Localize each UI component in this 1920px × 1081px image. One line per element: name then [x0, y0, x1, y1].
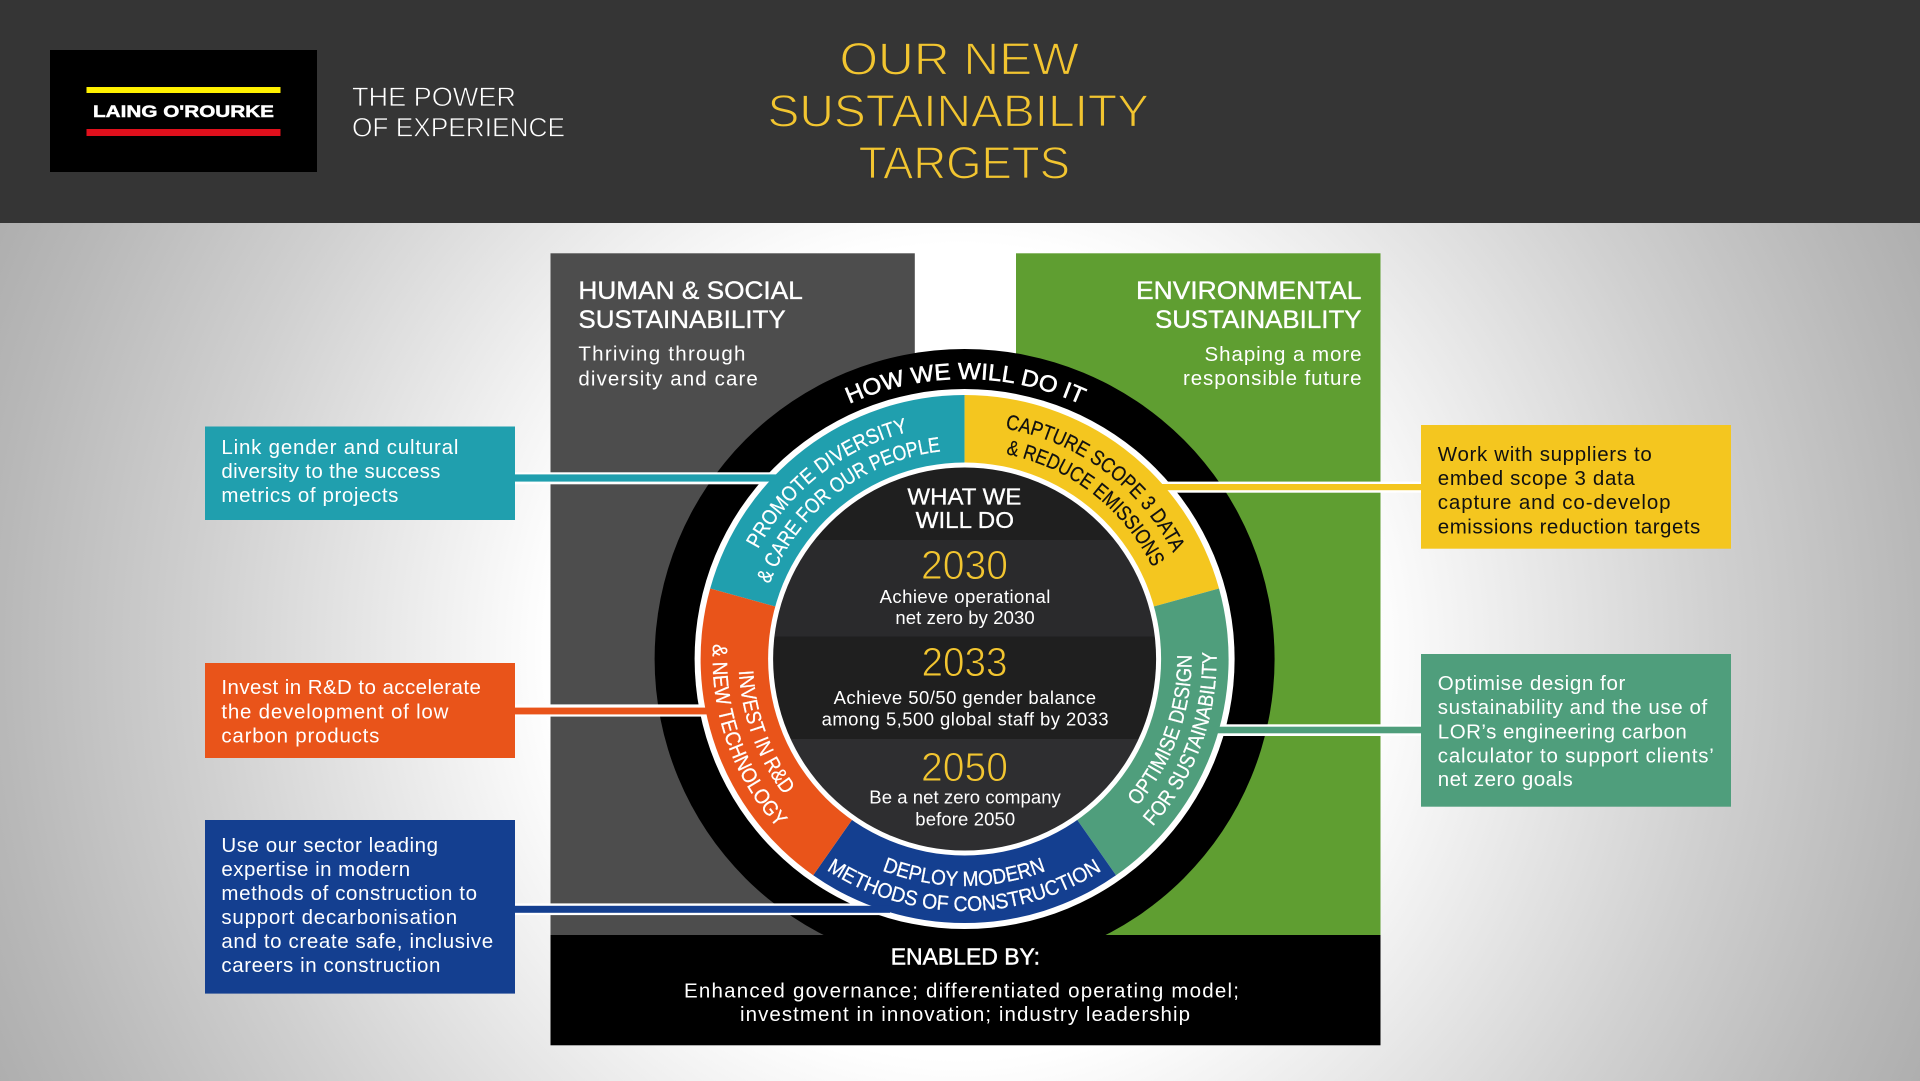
callout: yellow: emissions reduction targets [1438, 515, 1700, 538]
callout: yellow [1421, 425, 1731, 549]
target 2050: Be a net zero company [869, 786, 1062, 807]
callout: green: sustainability and the use of [1438, 696, 1707, 719]
callout: blue: methods of construction to [221, 882, 477, 905]
enabled by text: investment in innovation; industry leadership [740, 1003, 1190, 1026]
panel subheading: environmental: responsible future [1183, 367, 1362, 390]
target 2030: net zero by 2030 [895, 607, 1035, 628]
panel heading: environmental: ENVIRONMENTAL [1136, 277, 1362, 305]
callout: yellow: Work with suppliers to [1438, 443, 1652, 466]
inner heading [907, 484, 1021, 533]
callout: blue: support decarbonisation [221, 906, 457, 929]
panel: human and social sustainability [550, 253, 915, 935]
title: OUR NEW [840, 34, 1080, 85]
title: TARGETS [859, 138, 1070, 189]
segment: optimise design [1077, 588, 1229, 876]
callout: yellow: embed scope 3 data [1438, 467, 1635, 490]
callout: green: calculator to support clients’ [1438, 744, 1714, 767]
callout: teal: diversity to the success [221, 460, 440, 483]
callout: blue: and to create safe, inclusive [221, 930, 493, 953]
callout: orange: carbon products [221, 725, 379, 748]
callout: blue: expertise in modern [221, 858, 410, 881]
enabled by text: Enhanced governance; differentiated operating model; [684, 980, 1239, 1003]
callout: teal: metrics of projects [221, 484, 398, 507]
callout: teal: Link gender and cultural [221, 436, 458, 459]
target 2050 [869, 744, 1062, 830]
target 2030 [880, 542, 1050, 628]
panel subheading: environmental [1183, 343, 1362, 390]
segment: capture scope 3 data [964, 395, 1219, 606]
tagline: THE POWER [352, 82, 516, 112]
enabled by heading: ENABLED BY: [891, 944, 1040, 970]
title: SUSTAINABILITY [768, 86, 1149, 137]
panel subheading: human and social: Thriving through [578, 343, 745, 366]
connector: green [1213, 727, 1421, 733]
target 2050: 2050 [921, 744, 1008, 790]
callout: green: Optimise design for [1438, 672, 1625, 695]
connector outlines [515, 472, 1421, 915]
segment: deploy modern methods [813, 820, 1116, 923]
tagline [352, 82, 565, 143]
callout: green: LOR’s engineering carbon [1438, 720, 1687, 743]
segment: invest in R&D [700, 588, 852, 876]
inner heading: WILL DO [916, 507, 1014, 533]
panel heading: human and social [578, 277, 803, 334]
segment: promote diversity: PROMOTE DIVERSITY [746, 418, 904, 548]
panel heading: environmental [1136, 277, 1362, 334]
target 2030: 2030 [921, 542, 1008, 588]
tagline: OF EXPERIENCE [352, 113, 565, 143]
connector: blue [515, 906, 890, 913]
segment: capture scope 3 data: & REDUCE EMISSIONS [1007, 440, 1164, 566]
target 2033: Achieve 50/50 gender balance [834, 687, 1096, 708]
target 2050: before 2050 [915, 809, 1015, 830]
callout: orange: Invest in R&D to accelerate [221, 676, 481, 699]
callout: yellow: capture and co-develop [1438, 491, 1670, 514]
callout: orange [205, 663, 515, 758]
segment: optimise design: OPTIMISE DESIGN [1128, 656, 1192, 804]
segment: deploy modern methods: METHODS OF CONSTRUCTION [828, 858, 1101, 912]
logo: Laing O'Rourke: LAING O'ROURKE [93, 102, 274, 121]
target 2030: Achieve operational [880, 586, 1050, 607]
panel subheading: environmental: Shaping a more [1204, 343, 1362, 366]
connector: yellow [1158, 484, 1421, 490]
panel: environmental sustainability [1016, 253, 1380, 935]
segment: optimise design: FOR SUSTAINABILITY [1142, 652, 1217, 826]
enabled by text [684, 980, 1239, 1026]
panel heading: environmental: SUSTAINABILITY [1155, 306, 1362, 334]
callout: blue [205, 820, 515, 994]
page background [0, 222, 1920, 1081]
panel subheading: human and social: diversity and care [578, 367, 758, 390]
panel heading: human and social: SUSTAINABILITY [578, 306, 786, 334]
header band [0, 0, 1920, 223]
connector: orange [515, 708, 712, 714]
title [768, 34, 1149, 189]
target 2033 [822, 639, 1108, 730]
panel: enabled by [550, 935, 1380, 1045]
inner heading: WHAT WE [907, 484, 1021, 510]
callout: blue: careers in construction [221, 954, 440, 977]
target 2033: 2033 [922, 639, 1008, 685]
callout: blue: Use our sector leading [221, 834, 438, 857]
panel subheading: human and social [578, 343, 758, 390]
logo: Laing O'Rourke [50, 50, 317, 172]
white ring [695, 389, 1235, 929]
callout: green [1421, 654, 1731, 807]
segment: invest in R&D: INVEST IN R&D [738, 671, 794, 792]
segment: invest in R&D: & NEW TECHNOLOGY [712, 644, 788, 824]
segment: promote diversity [710, 395, 965, 606]
segment: deploy modern methods: DEPLOY MODERN [883, 857, 1045, 886]
target 2033: among 5,500 global staff by 2033 [822, 708, 1108, 730]
callout: green: net zero goals [1438, 768, 1573, 791]
outer black ring [655, 349, 1275, 969]
segment: capture scope 3 data: CAPTURE SCOPE 3 DATA [1007, 415, 1184, 554]
callout: teal [205, 426, 515, 520]
connector: teal [515, 474, 780, 482]
inner circle: what we will do [770, 465, 1160, 852]
inner white ring [768, 462, 1161, 856]
ring heading: how we will do it: HOW WE WILL DO IT [844, 362, 1088, 404]
panel heading: human and social: HUMAN & SOCIAL [578, 277, 803, 305]
callout: orange: the development of low [221, 700, 449, 724]
segment: promote diversity: & CARE FOR OUR PEOPLE [758, 437, 940, 583]
